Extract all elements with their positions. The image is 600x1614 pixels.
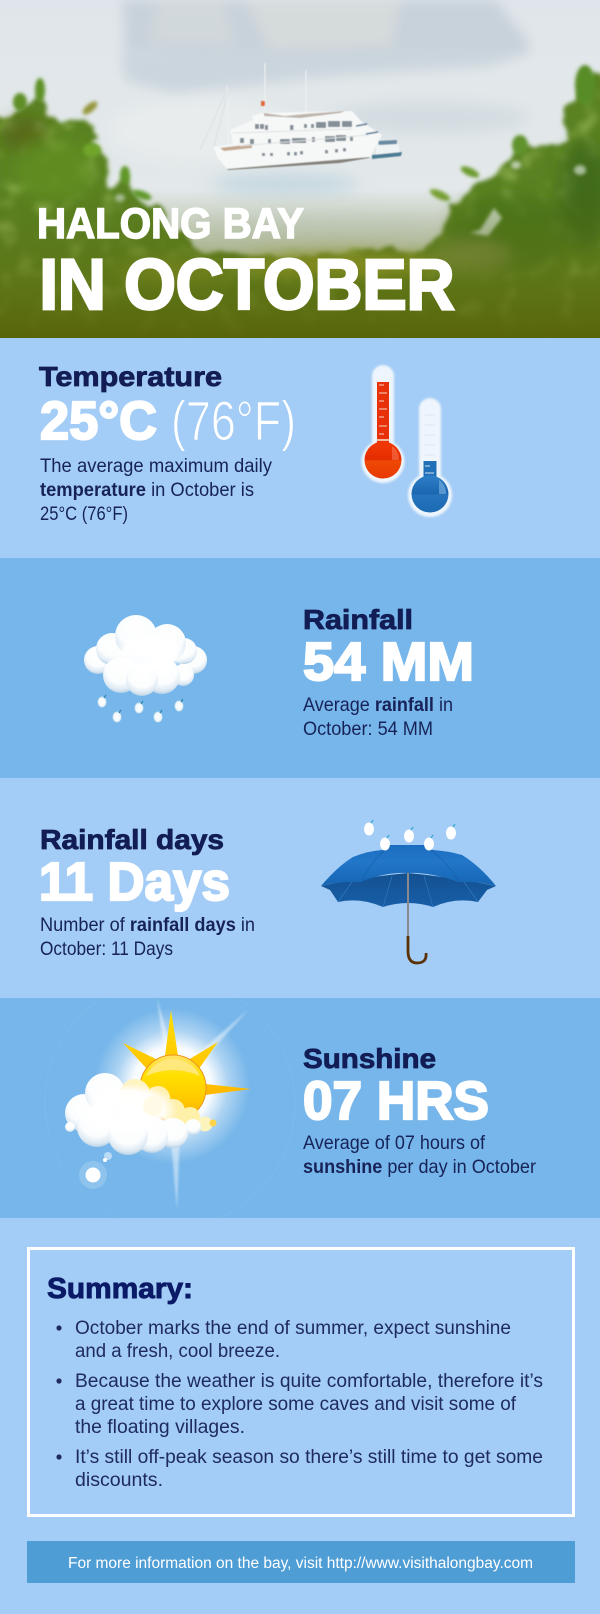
mountain (122, 0, 530, 94)
text: rainfall description (303, 695, 453, 740)
bullet list: October marks the end of summer, expect sunshine (75, 1318, 511, 1339)
cloud (65, 1073, 216, 1155)
stat: 07 HRS: 07 HRS (303, 1071, 489, 1131)
stat: 25°C (76°F): 25°C (40, 391, 157, 451)
title: IN OCTOBER (40, 246, 454, 325)
text: rainfall days description: October: 11 Days (40, 939, 173, 960)
panel: rainfall (0, 558, 600, 778)
text: rainfall days description: Number of rainfall days in (40, 915, 255, 936)
panel: summary (0, 1218, 600, 1614)
panel: rainfall days (0, 778, 600, 998)
title: HALONG BAY (37, 200, 304, 248)
text: sunshine description (303, 1133, 537, 1178)
water (110, 100, 530, 239)
icon: sun behind cloud (45, 978, 295, 1228)
bullet list: discounts. (75, 1470, 163, 1491)
icon: rain cloud (84, 615, 207, 722)
soft tonal patches (1, 117, 600, 284)
title (37, 200, 454, 325)
heading: rainfall: Rainfall (303, 604, 413, 635)
panel: sunshine (0, 978, 600, 1228)
stat: 54 MM: 54 MM (303, 632, 474, 692)
text: sunshine description: sunshine per day in October (303, 1157, 537, 1178)
text: temperature description: The average maximum daily (40, 456, 272, 477)
stat: 25°C (76°F) (40, 389, 296, 452)
text: rainfall description: October: 54 MM (303, 719, 433, 740)
text: temperature description: temperature in October is (40, 480, 254, 501)
heading: temperature: Temperature (39, 361, 222, 392)
bullet list: and a fresh, cool breeze. (75, 1341, 280, 1362)
stat: 11 Days: 11 Days (39, 852, 230, 912)
call to action bar: For more information on the bay, visit http://www.visithalongbay.com (68, 1555, 533, 1572)
blue thermometer (408, 398, 452, 517)
heading: sunshine: Sunshine (303, 1043, 436, 1074)
text: temperature description: 25°C (76°F) (40, 504, 128, 525)
call to action bar (27, 1541, 575, 1583)
text: rainfall days description (40, 915, 255, 960)
red thermometer (361, 365, 404, 483)
bullet list: a great time to explore some caves and visit some of (75, 1394, 517, 1415)
small cloud puffs (79, 1152, 112, 1189)
bullet list: It’s still off-peak season so there’s still time to get some (75, 1447, 543, 1468)
panel: temperature (0, 338, 600, 558)
bullet list (56, 1318, 543, 1491)
heading: rainfall days: Rainfall days (40, 824, 224, 855)
bullet list: the floating villages. (75, 1417, 245, 1438)
text: temperature description (40, 456, 272, 525)
text: sunshine description: Average of 07 hours of (303, 1133, 486, 1154)
rain drops (364, 820, 456, 850)
panel: hero photo of Halong Bay (0, 0, 600, 350)
icon: thermometers (361, 365, 452, 517)
icon: umbrella (321, 820, 496, 963)
ship (200, 63, 402, 170)
foliage masses (0, 60, 600, 350)
text: rainfall description: Average rainfall in (303, 695, 453, 716)
bullet list: Because the weather is quite comfortable, therefore it’s (75, 1371, 543, 1392)
heading: summary: Summary: (47, 1273, 193, 1305)
stat: 25°C (76°F): (76°F) (171, 389, 296, 452)
